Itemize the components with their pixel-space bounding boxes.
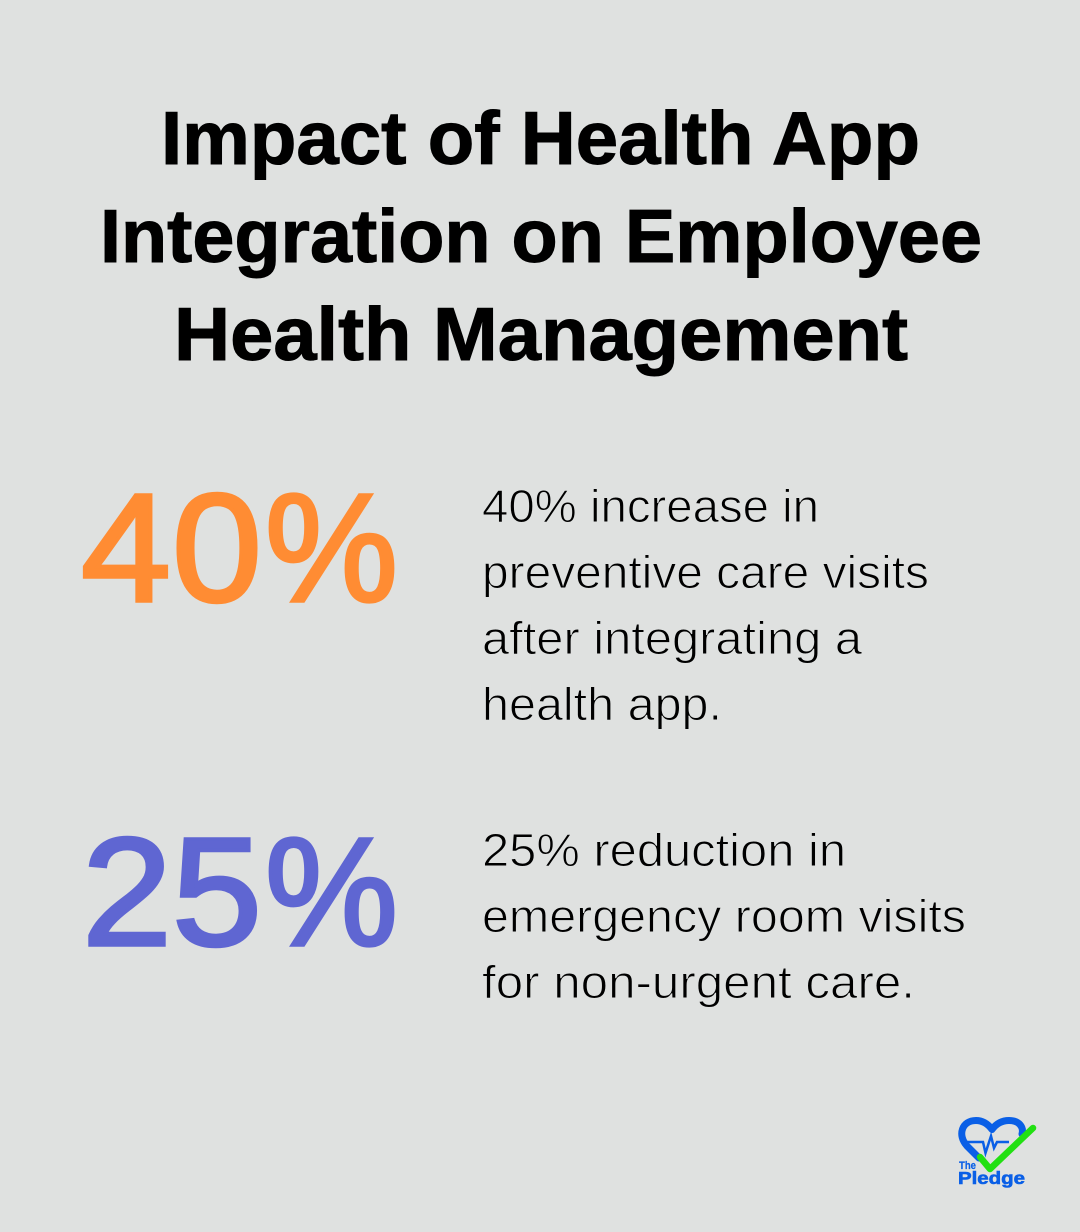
stat: 40%: % (265, 462, 398, 634)
description: 25% reduction: for non-urgent care. (482, 956, 915, 1008)
stat: 40%: 0 (172, 462, 262, 634)
stat: 25% (82, 806, 398, 978)
description: 40% increase (482, 480, 929, 730)
description: 40% increase: 40% increase in (482, 480, 819, 532)
title: Integration on Employee (100, 194, 982, 278)
description: 25% reduction: 25% reduction in (482, 824, 846, 876)
icon: heart (962, 1120, 1022, 1158)
logo: The Pledge (958, 1120, 1033, 1188)
icon: pulse line (967, 1136, 1009, 1153)
description: 25% reduction: emergency room visits (482, 890, 966, 942)
icon: check mark (980, 1128, 1033, 1169)
description: 40% increase: after integrating a (482, 612, 862, 664)
description: 40% increase: preventive care visits (482, 546, 929, 598)
stat: 25%: % (265, 806, 398, 978)
title (100, 96, 982, 376)
description: 25% reduction (482, 824, 966, 1008)
logo text (958, 1160, 1025, 1188)
logo text: Pledge (958, 1168, 1025, 1188)
stat: 40%: 4 (81, 462, 171, 634)
stat: 40% (81, 462, 398, 634)
title: Impact of Health App (161, 96, 920, 180)
stat: 25%: 2 (82, 806, 172, 978)
stat: 25%: 5 (172, 806, 262, 978)
title: Health Management (174, 292, 908, 376)
description: 40% increase: health app. (482, 678, 722, 730)
logo text: The (959, 1160, 976, 1172)
